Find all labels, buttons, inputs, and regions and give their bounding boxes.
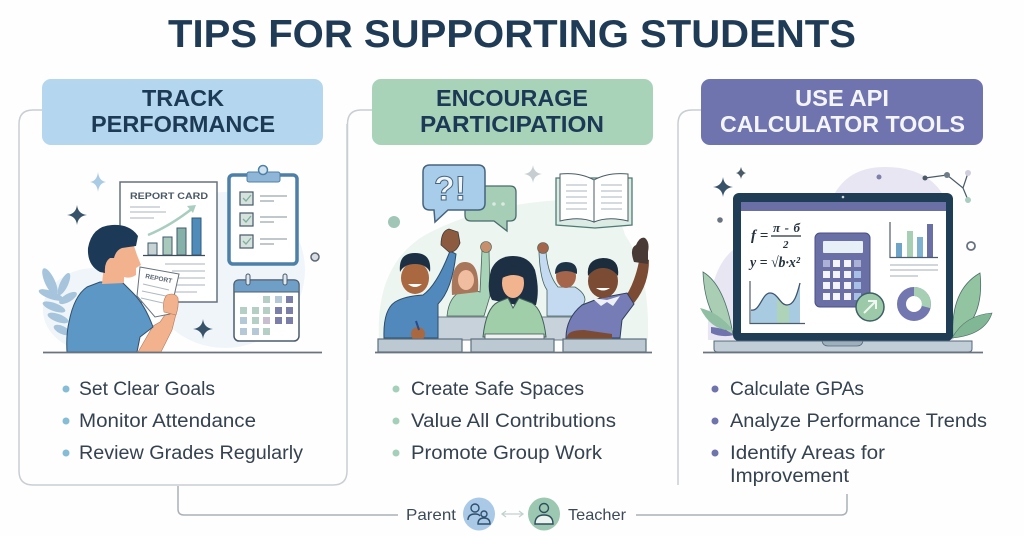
- heading: use API calculator tools: [701, 79, 983, 145]
- icon: small report sheet: REPORT: [145, 273, 173, 285]
- student back right: [538, 242, 585, 316]
- bullet list: Improvement: [730, 466, 850, 487]
- heading: track performance: [42, 79, 323, 145]
- formulas: π - б: [773, 220, 800, 235]
- bullet list: Identify Areas for: [730, 443, 886, 464]
- icon: calendar: [234, 274, 299, 341]
- bullet list: Calculate GPAs: [730, 379, 864, 400]
- sparkles: [713, 167, 975, 250]
- icon: right leaves: [952, 273, 992, 338]
- heading: use API calculator tools: CALCULATOR TOOLS: [720, 111, 965, 137]
- student centre: [483, 256, 546, 339]
- icon: leaves: [37, 266, 79, 337]
- title: TIPS FOR SUPPORTING STUDENTS: [168, 13, 856, 56]
- icon: growth badge: [856, 293, 884, 321]
- heading: encourage participation: PARTICIPATION: [420, 111, 604, 137]
- icon: speech bubbles: [423, 165, 516, 231]
- heading: track performance: PERFORMANCE: [91, 111, 275, 137]
- icon: network nodes: [922, 170, 971, 203]
- panel outline: [19, 110, 347, 485]
- heading: use API calculator tools: USE API: [795, 85, 889, 111]
- heading: track performance: TRACK: [142, 85, 224, 111]
- panel outline: [348, 110, 372, 300]
- bullet list: Promote Group Work: [411, 443, 603, 464]
- icon: report card: [120, 182, 217, 302]
- area chart: [750, 281, 805, 324]
- formulas: y = √b·x²: [748, 255, 800, 271]
- ground line: [43, 352, 322, 354]
- bullet list: Create Safe Spaces: [411, 379, 584, 400]
- illustration: student with report card: [37, 166, 322, 352]
- connector: parent-teacher link: [178, 486, 847, 530]
- icon: report card: REPORT CARD: [130, 191, 208, 202]
- icon: left leaves: [700, 272, 734, 336]
- front desks: [378, 339, 646, 352]
- label: parent: Parent: [406, 507, 457, 524]
- bullet list: Review Grades Regularly: [79, 443, 304, 464]
- bullet list: Set Clear Goals: [79, 379, 215, 400]
- ground line: [375, 352, 652, 354]
- sparkle and dot: [388, 165, 542, 228]
- panel: encourage participation: [348, 79, 653, 464]
- formulas: [748, 220, 801, 271]
- student left: [384, 229, 460, 341]
- ground line: [703, 352, 983, 354]
- icon: clipboard checklist: [229, 166, 297, 264]
- bullet list: Value All Contributions: [411, 411, 616, 432]
- bullet list: [392, 379, 616, 464]
- formulas: f =: [751, 228, 768, 244]
- bullet list: Analyze Performance Trends: [730, 411, 987, 432]
- person reading report: [67, 225, 179, 352]
- student right: [566, 238, 649, 339]
- panel: API calculator tools: [678, 79, 992, 487]
- icon: open book: [556, 174, 632, 228]
- arrow: two-way: [502, 511, 523, 517]
- sparkles: [67, 172, 319, 339]
- formulas: 2: [782, 239, 789, 251]
- heading: encourage participation: [372, 79, 653, 145]
- icon: speech bubbles: ?!: [434, 170, 466, 208]
- heading: encourage participation: ENCOURAGE: [436, 85, 588, 111]
- student back left: [447, 242, 492, 316]
- rear desks: [438, 317, 582, 340]
- icon: parent: [463, 498, 495, 530]
- bullet list: [712, 379, 987, 487]
- bullet list: Monitor Attendance: [79, 411, 256, 432]
- icon: teacher: [528, 498, 560, 530]
- connector line left: [178, 486, 398, 515]
- connector line right: [636, 494, 847, 515]
- illustration: laptop with calculator: [700, 167, 992, 352]
- label: teacher: Teacher: [568, 507, 627, 524]
- bullet list: [62, 379, 304, 464]
- panel outline: [678, 110, 701, 485]
- icon: laptop: [714, 193, 972, 352]
- donut chart: [902, 292, 926, 316]
- panel: track performance: [19, 79, 347, 485]
- illustration: classroom students: [375, 165, 652, 352]
- bar chart: [890, 222, 938, 276]
- icon: calculator: [815, 233, 884, 321]
